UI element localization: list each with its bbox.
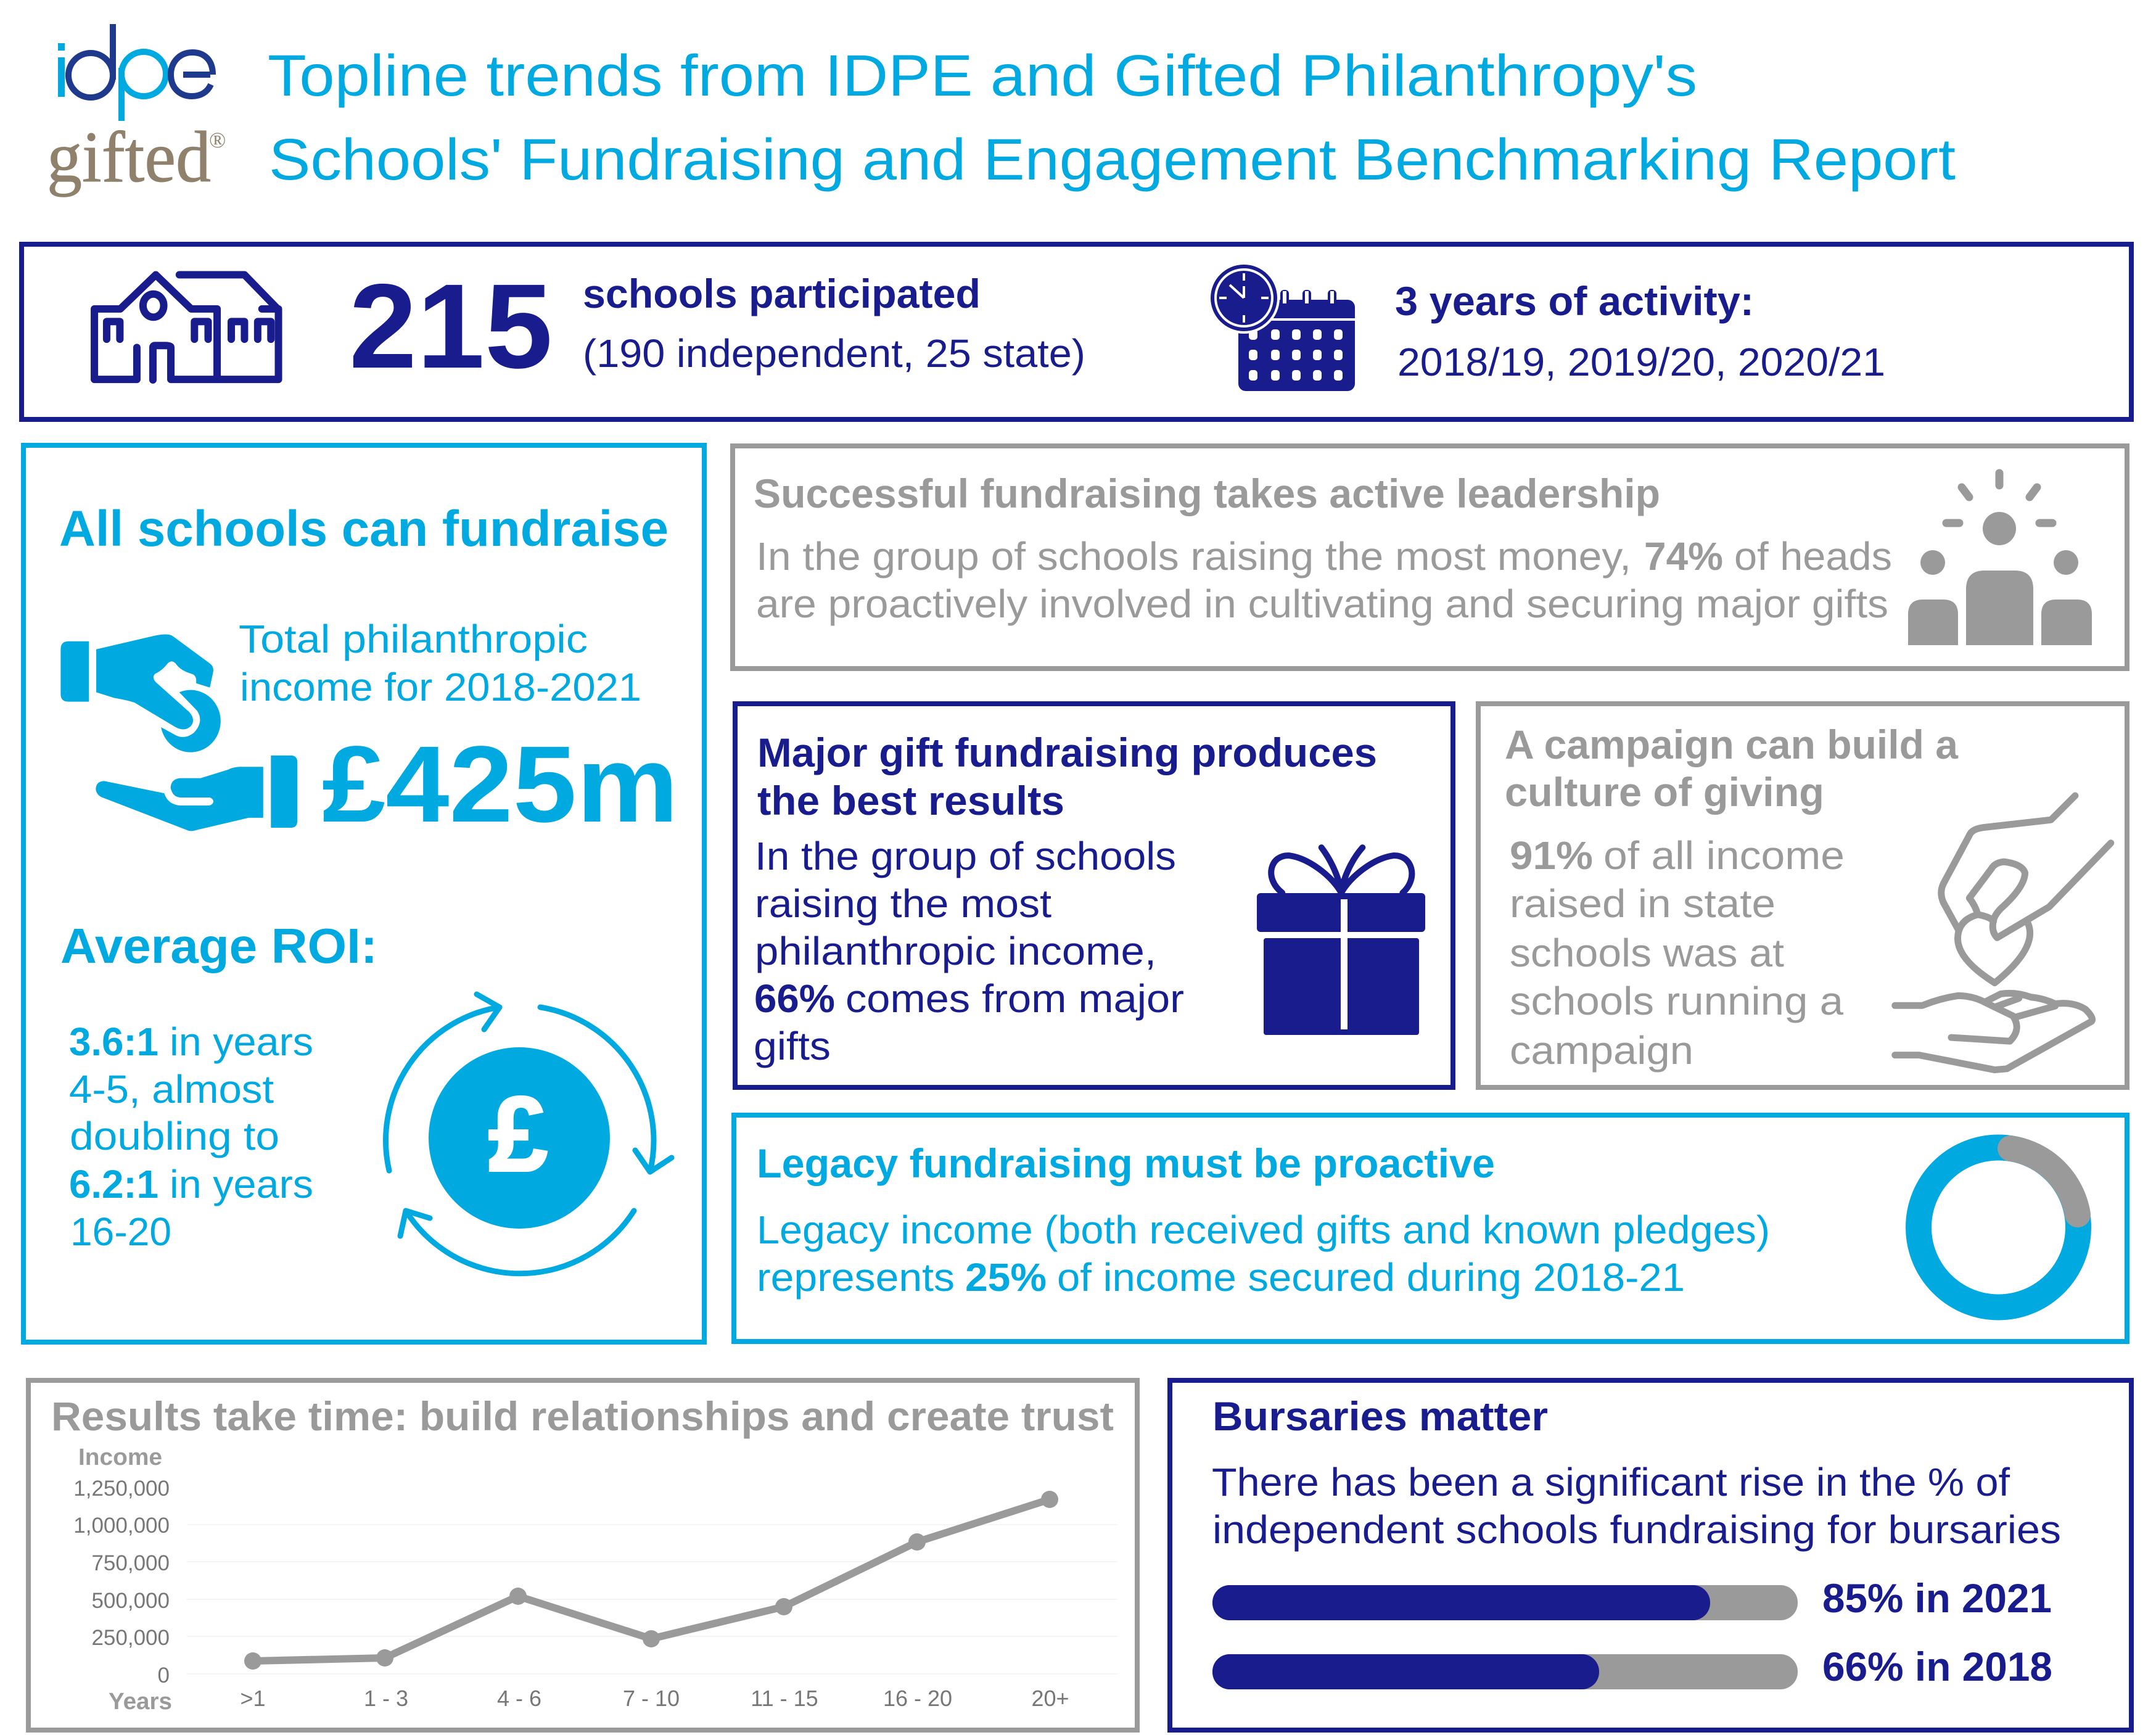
text: 3 years of activity <box>1395 278 1885 384</box>
chart: income by years: 1 - 3 <box>364 1686 408 1711</box>
icon: gift box <box>1257 847 1425 1035</box>
text: legacy detail: Legacy income (both received gifts and known pledges) <box>757 1208 1770 1252</box>
bar: 85% in 2021: 85% in 2021 <box>1822 1575 2052 1621</box>
text: legacy detail: represents <box>757 1255 955 1300</box>
text: campaign detail: raised in state <box>1510 881 1775 926</box>
text: campaign detail: of all income <box>1603 833 1845 878</box>
chart: legacy donut 25% <box>1919 1147 2078 1308</box>
bar: 66% in 2018: 66% in 2018 <box>1822 1644 2052 1689</box>
heading: all schools can fundraise: All schools can fundraise <box>59 501 669 557</box>
text: leadership detail: In the group of schools raising the most money, <box>756 534 1631 579</box>
text: leadership detail: 74% <box>1644 534 1723 579</box>
stat: 215 schools: 215 <box>349 259 553 394</box>
icon: school building <box>94 275 279 380</box>
chart: income by years: 7 - 10 <box>623 1686 680 1711</box>
heading: bursaries matter: Bursaries matter <box>1212 1393 1548 1439</box>
icon: calendar and clock <box>1208 262 1355 391</box>
text: legacy detail: 25% <box>965 1255 1047 1300</box>
text: major gift detail: raising the most <box>755 881 1051 926</box>
title: Schools' Fundraising and Engagement Benchmarking Report <box>269 127 1956 192</box>
text: major gift detail: gifts <box>754 1024 831 1068</box>
panel: major gift fundraising <box>735 704 1453 1087</box>
heading: campaign <box>1505 722 1959 815</box>
title <box>268 43 1956 192</box>
chart: income by years: 4 - 6 <box>497 1686 541 1711</box>
text: ROI detail: 4-5, almost <box>69 1067 274 1111</box>
chart: income by years: 20+ <box>1031 1686 1069 1711</box>
text: ROI detail: doubling to <box>70 1114 279 1158</box>
icon: hand giving heart <box>1895 796 2111 1070</box>
heading: campaign: culture of giving <box>1505 769 1824 815</box>
icon: leader with team <box>1908 473 2092 645</box>
text: campaign detail <box>1510 833 1845 1073</box>
panel: all schools can fundraise <box>23 445 704 1342</box>
text: schools participated <box>583 271 1085 376</box>
bar: 85% in 2021 <box>1212 1575 2052 1621</box>
text: ROI detail: in years <box>170 1020 313 1064</box>
panel: schools and years summary <box>22 244 2131 419</box>
title: Topline trends from IDPE and Gifted Philanthropy's <box>268 43 1697 109</box>
panel: campaign culture of giving <box>1478 704 2127 1087</box>
text: leadership detail: are proactively involved in cultivating and securing major gifts <box>756 582 1888 626</box>
text: total philanthropic income: Total philanthropic <box>239 617 588 661</box>
text: campaign detail: schools running a <box>1510 979 1843 1023</box>
text: legacy detail <box>757 1208 1770 1300</box>
chart: income by years: 16 - 20 <box>883 1686 952 1711</box>
bar: 66% in 2018 <box>1212 1644 2052 1689</box>
logo: gifted: ® <box>209 128 226 152</box>
text: ROI detail: in years <box>170 1162 313 1206</box>
panel: legacy fundraising <box>734 1115 2127 1341</box>
chart: income by years: 1,000,000 <box>73 1514 170 1538</box>
text: bursaries detail <box>1212 1460 2061 1552</box>
text: schools participated: schools participated <box>583 271 981 316</box>
chart: income by years: 250,000 <box>91 1626 170 1650</box>
panel: active leadership <box>733 446 2127 669</box>
text: major gift detail <box>754 834 1184 1068</box>
text: bursaries detail: There has been a significant rise in the % of <box>1212 1460 2010 1504</box>
text: legacy detail: of income secured during 2018-21 <box>1057 1255 1685 1300</box>
chart: income by years: 11 - 15 <box>751 1686 818 1711</box>
text: ROI detail: 6.2:1 <box>69 1162 158 1206</box>
heading: average ROI: Average ROI: <box>60 918 377 973</box>
logo: idpe <box>58 24 213 121</box>
text: campaign detail: schools was at <box>1510 931 1784 975</box>
text: schools participated: (190 independent, 25 state) <box>583 331 1085 376</box>
chart: income by years: 0 <box>158 1663 170 1688</box>
text: major gift detail: comes from major <box>846 976 1184 1021</box>
text: 3 years of activity: 2018/19, 2019/20, 2020/21 <box>1397 340 1885 384</box>
logo: gifted: gifted <box>47 117 211 197</box>
text: campaign detail: campaign <box>1510 1028 1693 1073</box>
text: leadership detail <box>756 534 1892 626</box>
text: major gift detail: philanthropic income, <box>755 929 1156 973</box>
panel: bursaries matter <box>1170 1380 2131 1730</box>
icon: pound coin with cycle arrows <box>386 994 672 1274</box>
text: leadership detail: of heads <box>1734 534 1892 579</box>
text: major gift detail: 66% <box>754 976 835 1021</box>
text: total philanthropic income <box>239 617 641 709</box>
chart: income by years: >1 <box>240 1686 266 1711</box>
text: campaign detail: 91% <box>1510 833 1593 878</box>
text: ROI detail: 3.6:1 <box>69 1020 158 1064</box>
heading: major gift fundraising: Major gift fundraising produces <box>757 730 1377 775</box>
text: ROI detail: 16-20 <box>70 1210 171 1254</box>
text: major gift detail: In the group of schools <box>755 834 1176 878</box>
chart: income by years: 1,250,000 <box>73 1477 170 1501</box>
icon: hands passing a coin <box>60 635 297 831</box>
heading: major gift fundraising <box>757 730 1377 823</box>
heading: active leadership: Successful fundraising takes active leadership <box>754 471 1660 516</box>
text: ROI detail <box>69 1020 313 1254</box>
heading: legacy: Legacy fundraising must be proactive <box>757 1140 1495 1186</box>
panel: results take time <box>28 1380 1137 1730</box>
text: bursaries detail: independent schools fundraising for bursaries <box>1212 1507 2061 1552</box>
heading: major gift fundraising: the best results <box>757 778 1064 823</box>
chart: income by years: Years <box>109 1689 172 1715</box>
heading: results take time: Results take time: build relationships and create trust <box>51 1393 1114 1439</box>
text: total philanthropic income: income for 2018-2021 <box>240 665 641 709</box>
chart: income by years <box>73 1444 1117 1715</box>
icon: pound coin with cycle arrows: £ <box>488 1075 548 1193</box>
chart: income by years: Income <box>78 1444 162 1470</box>
heading: campaign: A campaign can build a <box>1505 722 1959 767</box>
text: 3 years of activity: 3 years of activity: <box>1395 278 1754 324</box>
stat: £425m: £425m <box>322 724 678 845</box>
chart: income by years: 750,000 <box>91 1551 170 1575</box>
chart: income by years: 500,000 <box>91 1589 170 1613</box>
